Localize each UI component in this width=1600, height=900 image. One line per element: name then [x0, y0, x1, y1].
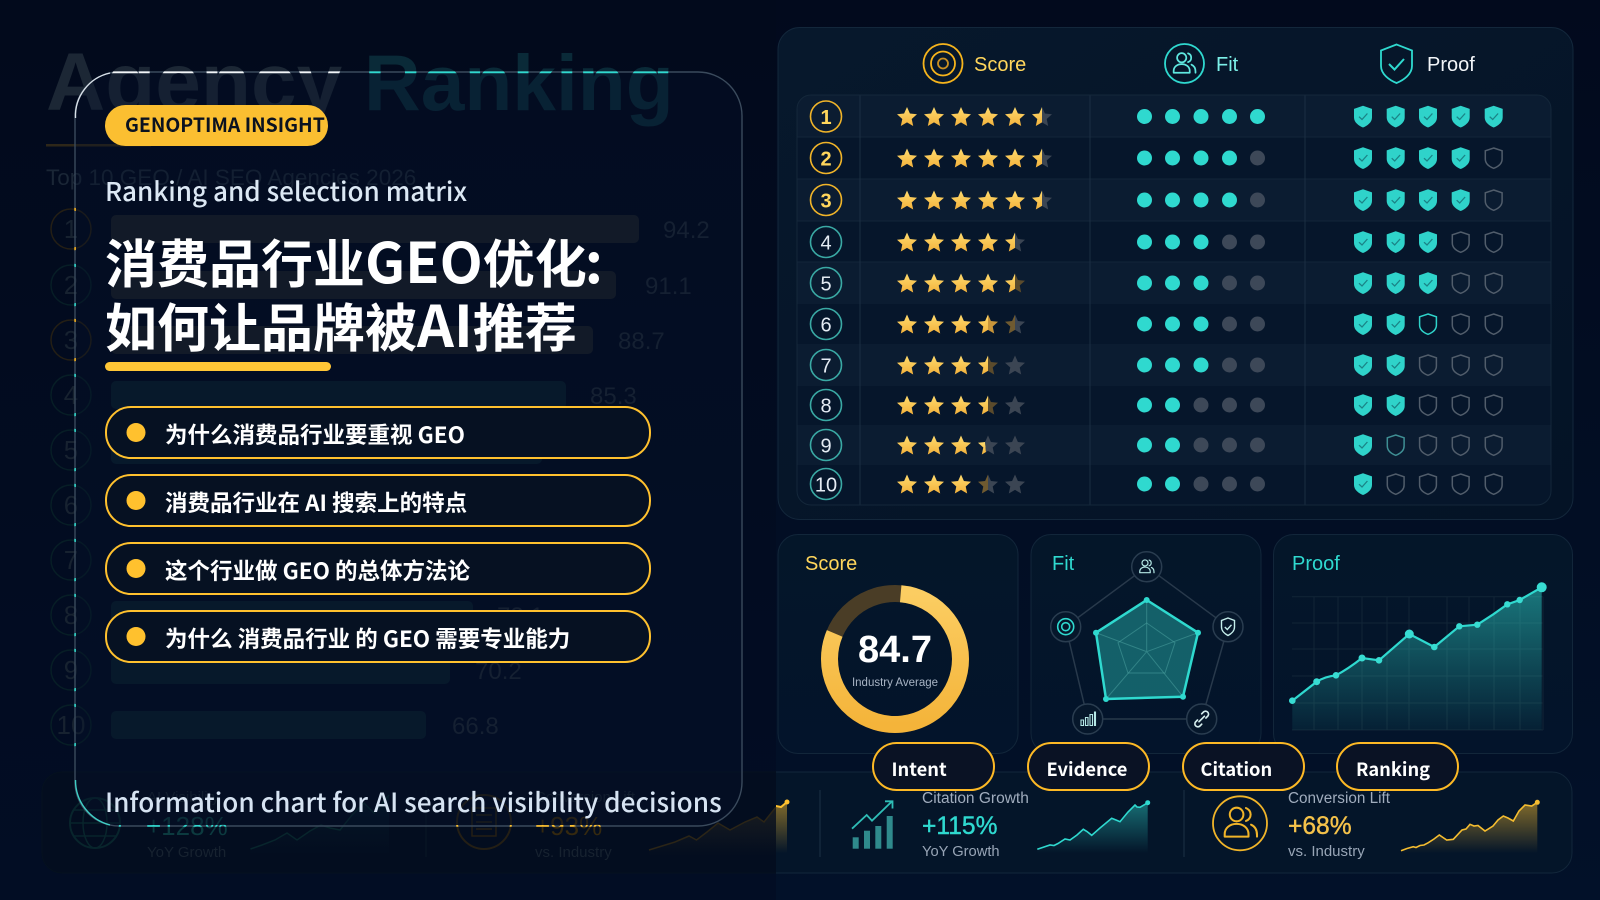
- border highlights where ghost content crosses: [112, 71, 668, 74]
- donut chart: Industry Average: [852, 677, 938, 689]
- ghost stats band: +93%: [535, 811, 602, 841]
- chip: Evidence: Evidence: [1046, 756, 1127, 782]
- row 5: [810, 268, 1502, 298]
- row 3: 3: [820, 190, 832, 212]
- row 2: 2: [820, 148, 832, 170]
- row 5: 5: [820, 274, 832, 296]
- list item 4: [106, 611, 650, 662]
- panel: Proof trend: [1274, 534, 1572, 754]
- stat: Citation Growth: +115%: [922, 813, 997, 840]
- ghost rank circles: 1: [64, 214, 78, 244]
- ghost ranking values: 94.2: [663, 217, 710, 244]
- stat: Citation Growth: YoY Growth: [922, 844, 1000, 860]
- panel: Score gauge: Score: [805, 553, 857, 575]
- subtitle: Ranking and selection matrix: [105, 171, 467, 209]
- ghost stats band: YoY Growth: [147, 844, 226, 861]
- row 9: [810, 430, 1502, 460]
- ghost rank circles: 6: [64, 490, 78, 520]
- ghost ranking values: 66.8: [452, 713, 499, 740]
- ghost stats band: AI Visibility: [147, 789, 220, 806]
- row 1: [810, 101, 1503, 132]
- icon: users circle: [1213, 796, 1267, 850]
- row 3: [810, 184, 1502, 216]
- chip: Ranking: Ranking: [1356, 756, 1430, 782]
- radar chart: [1066, 567, 1228, 719]
- row 4: [810, 226, 1502, 258]
- brand badge: [105, 105, 328, 146]
- panel: Fit radar: Fit: [1052, 553, 1075, 575]
- border highlights where ghost content crosses: Ranking: [364, 39, 674, 127]
- icon: target node: [1051, 612, 1081, 642]
- row 6: [810, 308, 1502, 340]
- ghost heading: Agency Ranking: Agency: [46, 37, 343, 128]
- header: Fit: [1165, 44, 1239, 83]
- ghost ranking values: 85.3: [590, 383, 637, 410]
- chip: Evidence: [1028, 743, 1149, 790]
- header: Fit: Fit: [1216, 54, 1239, 76]
- list item 1: [106, 407, 650, 458]
- ghost rank circles: [51, 209, 91, 745]
- icon: users node: [1132, 552, 1162, 582]
- footer caption: Information chart for AI search visibility decisions: [105, 782, 722, 820]
- chip: Intent: [873, 743, 994, 790]
- icon: rising bars: [852, 801, 893, 849]
- list item 4: 为什么 消费品行业 的 GEO 需要专业能力: [165, 622, 570, 654]
- ghost ranking values: 88.7: [618, 328, 665, 355]
- ghost ranking values: 78.4: [541, 493, 588, 520]
- panel: Fit radar: [1031, 534, 1261, 754]
- list item 3: [106, 543, 650, 594]
- stat: Citation Growth: [922, 790, 1029, 860]
- chip: Intent: Intent: [892, 756, 947, 782]
- panel: stats band: [770, 772, 1572, 873]
- ghost stats band: vs. Industry: [535, 844, 612, 861]
- title: 如何让品牌被AI推荐: [105, 280, 577, 364]
- stat: Conversion Lift: +68%: [1288, 813, 1352, 840]
- ghost ranking values: 91.1: [645, 273, 692, 300]
- ghost rank circles: 7: [64, 545, 78, 575]
- icon: evidence node: [1073, 704, 1103, 734]
- ghost layer: faded ranking poster behind the overlay: [42, 37, 802, 873]
- list item 2: [106, 475, 650, 526]
- sparkline: citation growth: [1037, 800, 1150, 853]
- stat: Citation Growth: Citation Growth: [922, 790, 1029, 807]
- ghost subtitle: Top 10 GEO / AI SEO Agencies 2026: [46, 165, 416, 190]
- overlay panel: left glass card: +128%: [146, 811, 228, 841]
- ghost rank circles: 9: [64, 655, 78, 685]
- ghost ranking values: 81.9: [566, 438, 613, 465]
- list item 1: 为什么消费品行业要重视 GEO: [165, 418, 465, 450]
- row 10: 10: [815, 474, 837, 496]
- area chart: [1289, 582, 1547, 730]
- border highlights where ghost content crosses: Agency: [46, 37, 343, 128]
- ghost heading: Agency Ranking: Ranking: [364, 39, 674, 127]
- stat: Conversion Lift: [1288, 790, 1391, 860]
- panel: Proof trend: Proof: [1292, 553, 1340, 575]
- header: Score: Score: [974, 54, 1026, 76]
- brand badge: GENOPTIMA INSIGHT: [125, 109, 325, 138]
- header: Proof: [1381, 44, 1475, 83]
- icon: proof node: [1213, 612, 1243, 642]
- ghost stats band: Conversion Lift: [535, 789, 636, 806]
- table grid: [797, 95, 1551, 505]
- row 1: 1: [820, 107, 832, 129]
- panel: Score gauge: [778, 534, 1018, 754]
- row 8: [810, 390, 1502, 420]
- row 7: [810, 350, 1502, 380]
- sparkline: conversion lift: [1401, 800, 1540, 853]
- donut chart: [829, 594, 960, 725]
- row 4: 4: [820, 232, 832, 254]
- list item 2: 消费品行业在 AI 搜索上的特点: [165, 486, 467, 518]
- ghost accent line: [46, 144, 151, 146]
- sparkline: cut-off gold trend: [776, 800, 790, 850]
- title underline: [105, 362, 331, 371]
- title: 消费品行业GEO优化:: [105, 219, 603, 300]
- ghost ranking values: 75.6: [520, 548, 567, 575]
- row 6: 6: [820, 314, 832, 336]
- overlay panel: left glass card: +93%: [535, 811, 602, 841]
- row 8: 8: [820, 396, 832, 418]
- header: Score: [924, 44, 1026, 83]
- ghost stats band: [69, 791, 776, 860]
- stat: Conversion Lift: Conversion Lift: [1288, 790, 1391, 807]
- panel: ranking matrix: [778, 28, 1573, 520]
- row 10: [810, 468, 1502, 500]
- header: Proof: Proof: [1427, 54, 1475, 76]
- title: [105, 219, 603, 364]
- ghost rank circles: 8: [64, 600, 78, 630]
- overlay panel: left glass card: [74, 71, 743, 827]
- chip: Citation: [1183, 743, 1304, 790]
- ghost ranking values: 73.1: [497, 603, 544, 630]
- ghost rank circles: 10: [57, 710, 85, 740]
- ghost ranking values: [452, 217, 710, 740]
- donut chart: 84.7: [858, 629, 932, 671]
- ghost ranking bars: [111, 215, 639, 739]
- ghost rank circles: 2: [64, 270, 78, 300]
- ghost rank circles: 5: [64, 435, 78, 465]
- row 2: [810, 142, 1502, 174]
- list item 3: 这个行业做 GEO 的总体方法论: [165, 554, 471, 586]
- ghost rank circles: 3: [64, 325, 78, 355]
- row 9: 9: [820, 436, 832, 458]
- ghost stats band: +128%: [146, 811, 228, 841]
- chip: Citation: Citation: [1200, 756, 1272, 782]
- ghost ranking values: 70.2: [475, 658, 522, 685]
- row 7: 7: [820, 356, 832, 378]
- ghost rank circles: 4: [64, 380, 78, 410]
- icon: citation node: [1187, 704, 1217, 734]
- chip: Ranking: [1337, 743, 1458, 790]
- stat: Conversion Lift: vs. Industry: [1288, 843, 1365, 860]
